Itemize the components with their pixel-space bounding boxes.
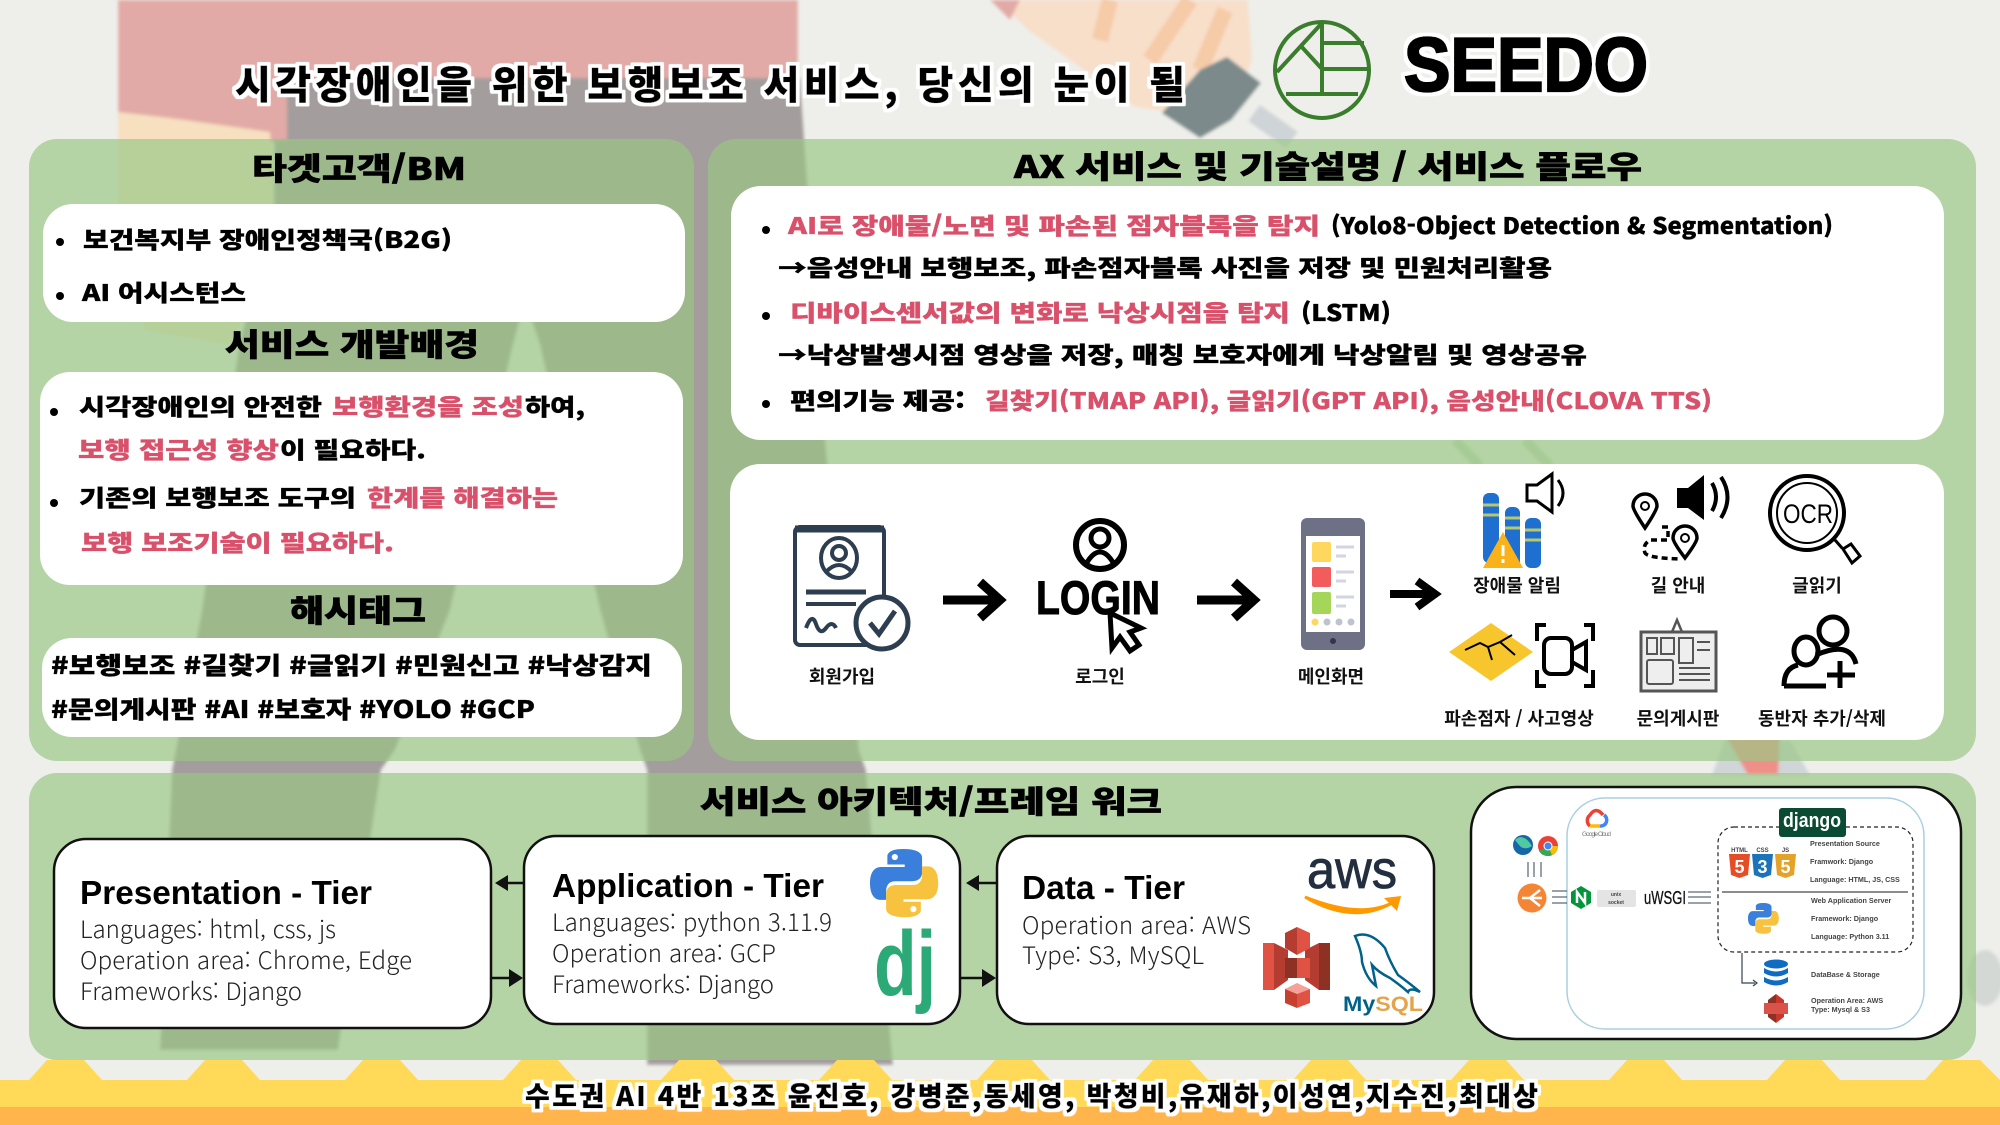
- label: obstacle alert: 장애물 알림: [1473, 572, 1561, 598]
- text: presentation source: [1810, 839, 1900, 884]
- card: presentation tier: Languages: html, css, js: [80, 910, 336, 945]
- card: hashtags: #문의게시판 #AI #보호자 #YOLO #GCP: [51, 690, 535, 725]
- arrows: uWSGI to django: [1688, 892, 1711, 903]
- arrows: browser to load balancer: [1528, 862, 1541, 877]
- card: AX description: (LSTM): [1301, 294, 1391, 328]
- logo: django: django: [1783, 810, 1841, 832]
- arrow: to login: [943, 582, 1000, 618]
- heading: AX service: AX 서비스 및 기술설명 / 서비스 플로우: [1013, 142, 1642, 187]
- text: database: [1811, 970, 1883, 1014]
- card: hashtags: #보행보조 #길찾기 #글읽기 #민원신고 #낙상감지: [51, 646, 652, 681]
- card: application tier: Languages: python 3.11.9: [552, 903, 832, 938]
- card: AX description: [731, 186, 1944, 440]
- icon: phone main screen: [1301, 518, 1365, 650]
- label: login: 로그인: [1075, 663, 1125, 689]
- panel: target customers and background: [29, 139, 694, 761]
- icon: add companion: [1784, 617, 1856, 688]
- text: database: DataBase & Storage: [1811, 970, 1880, 979]
- card: architecture diagram: [1471, 787, 1961, 1039]
- card: service background: 보행 접근성 향상: [78, 431, 279, 465]
- card: target customers: 보건복지부 장애인정책국(B2G): [83, 221, 452, 255]
- card: application tier: Application - Tier: [552, 867, 824, 904]
- icon: OCR magnifier: OCR: [1783, 499, 1833, 529]
- heading: target customers: 타겟고객/BM: [252, 144, 466, 189]
- icon: database: [1764, 960, 1788, 986]
- card: service background: 보행 보조기술이 필요하다.: [81, 524, 394, 558]
- card: AX description: 길찾기(TMAP API), 글읽기(GPT API), 음성안내(CLOVA TTS): [985, 382, 1712, 416]
- card: presentation tier: [54, 839, 491, 1028]
- icon: load balancer: [1518, 884, 1546, 912]
- card: application tier: Frameworks: Django: [552, 965, 774, 1000]
- arrow: to main screen: [1197, 582, 1254, 618]
- icon: python small: [1748, 903, 1779, 934]
- label: route guide: 길 안내: [1651, 572, 1705, 598]
- card: data tier: Data - Tier: [1022, 869, 1185, 906]
- icon: inquiry board: [1641, 620, 1716, 691]
- icons: html css js: [1729, 848, 1796, 878]
- label: damaged block / accident video: 파손점자 / 사고영상: [1444, 705, 1594, 731]
- label: add companion: 동반자 추가/삭제: [1758, 705, 1886, 731]
- card: application tier: [524, 836, 960, 1024]
- arrows: load balancer to nginx: [1552, 891, 1567, 903]
- arrow: to database: [1742, 953, 1757, 986]
- icon: nginx: [1571, 886, 1591, 909]
- arrows between tiers: [491, 875, 997, 987]
- card: service background: 기존의 보행보조 도구의: [79, 479, 356, 513]
- icons: html css js: 5: [1780, 857, 1791, 877]
- panel: service architecture: [29, 773, 1976, 1060]
- icon: OCR magnifier: [1770, 476, 1860, 563]
- heading: hashtags: 해시태그: [290, 586, 426, 631]
- uWSGI: uWSGI: [1644, 888, 1686, 908]
- card: service background: [40, 372, 683, 585]
- card: service flow: [730, 464, 1944, 740]
- card: hashtags: [42, 638, 682, 737]
- card: AX description: (Yolo8-Object Detection & Segmentation): [1331, 207, 1833, 241]
- label: main screen: 메인화면: [1298, 663, 1364, 689]
- card: service background: 이 필요하다.: [280, 431, 426, 465]
- card: service background: 보행환경을 조성: [332, 388, 524, 422]
- heading: service background: 서비스 개발배경: [225, 320, 479, 365]
- icon: damaged block and camera: [1449, 623, 1593, 686]
- unix socket: [1597, 890, 1636, 907]
- icon: google cloud: Google Cloud: [1582, 831, 1611, 838]
- text: presentation source: Language: HTML, JS, CSS: [1810, 875, 1900, 884]
- text: presentation source: Framwork: Django: [1810, 857, 1874, 866]
- icon: aws: aws: [1307, 840, 1397, 900]
- label: inquiry board: 문의게시판: [1637, 705, 1720, 731]
- card: target customers: [43, 204, 685, 322]
- text: presentation source: Presentation Source: [1810, 839, 1880, 848]
- label: read text: 글읽기: [1792, 572, 1842, 598]
- text: database: Operation Area: AWS: [1811, 996, 1883, 1005]
- icon: google cloud: [1582, 810, 1611, 838]
- card: presentation tier: Operation area: Chrome, Edge: [80, 941, 412, 976]
- unix socket: socket: [1608, 900, 1624, 906]
- title: 시각장애인을 위한 보행보조 서비스, 당신의 눈이 될: [235, 55, 1185, 111]
- footer band: [0, 1060, 2000, 1125]
- label: sign up: 회원가입: [809, 663, 875, 689]
- icon: login: [1036, 521, 1160, 651]
- logo: django: [1779, 808, 1846, 837]
- icons: html css js: 5: [1734, 857, 1745, 877]
- logo mark: [1275, 22, 1369, 118]
- card: AX description: →음성안내 보행보조, 파손점자블록 사진을 저장 및 민원처리활용: [778, 249, 1552, 283]
- text: web application server: Language: Python 3.11: [1811, 932, 1889, 941]
- panel: AX service and flow: [708, 139, 1976, 761]
- icon: mysql: MySQL: [1343, 993, 1423, 1016]
- card: target customers: AI 어시스턴스: [81, 274, 246, 308]
- text: web application server: [1811, 896, 1891, 941]
- SEEDO wordmark: SEEDO: [1404, 23, 1648, 108]
- icon: obstacle alert: [1483, 474, 1563, 568]
- icon: python: [870, 849, 938, 917]
- card: AX description: 편의기능 제공:: [790, 382, 965, 416]
- card: data tier: Type: S3, MySQL: [1022, 936, 1204, 971]
- icon: django dj: dj: [874, 913, 936, 1015]
- icons: html css js: CSS: [1756, 848, 1769, 854]
- card: AX description: AI로 장애물/노면 및 파손된 점자블록을 탐지: [787, 207, 1320, 241]
- icon: route guide: [1633, 475, 1728, 559]
- unix socket: unix: [1611, 892, 1621, 898]
- arrow: to features: [1390, 581, 1435, 607]
- icon: S3 small: [1764, 994, 1788, 1023]
- icon: S3: [1263, 927, 1330, 1008]
- card: application tier: Operation area: GCP: [552, 934, 776, 969]
- card: service background: 시각장애인의 안전한: [79, 388, 322, 422]
- card: presentation tier: Frameworks: Django: [80, 972, 302, 1007]
- icon: login: LOGIN: [1036, 571, 1160, 624]
- card: data tier: Operation area: AWS: [1022, 906, 1251, 941]
- text: web application server: Web Application Server: [1811, 896, 1891, 905]
- dashed django group: [1718, 808, 1913, 952]
- text: web application server: Framework: Django: [1811, 914, 1879, 923]
- icon: browsers: [1513, 835, 1558, 856]
- icons: html css js: HTML: [1731, 848, 1748, 854]
- text: database: Type: Mysql & S3: [1811, 1005, 1870, 1014]
- icons: html css js: JS: [1782, 848, 1789, 854]
- card: AX description: →낙상발생시점 영상을 저장, 매칭 보호자에게 낙상알림 및 영상공유: [778, 336, 1587, 370]
- footer team names: 수도권 AI 4반 13조 윤진호, 강병준,동세영, 박청비,유재하,이성연,지수진,최대상: [525, 1075, 1538, 1114]
- card: AX description: 디바이스센서값의 변화로 낙상시점을 탐지: [790, 294, 1290, 328]
- icon: mysql: [1343, 934, 1423, 1016]
- icons: html css js: 3: [1757, 857, 1768, 877]
- heading: architecture: 서비스 아키텍처/프레임 워크: [700, 777, 1162, 822]
- card: service background: 한계를 해결하는: [367, 479, 558, 513]
- card: presentation tier: Presentation - Tier: [80, 874, 372, 911]
- card: data tier: [997, 836, 1434, 1024]
- card: service background: 하여,: [525, 388, 585, 422]
- icon: sign up document: [795, 527, 908, 649]
